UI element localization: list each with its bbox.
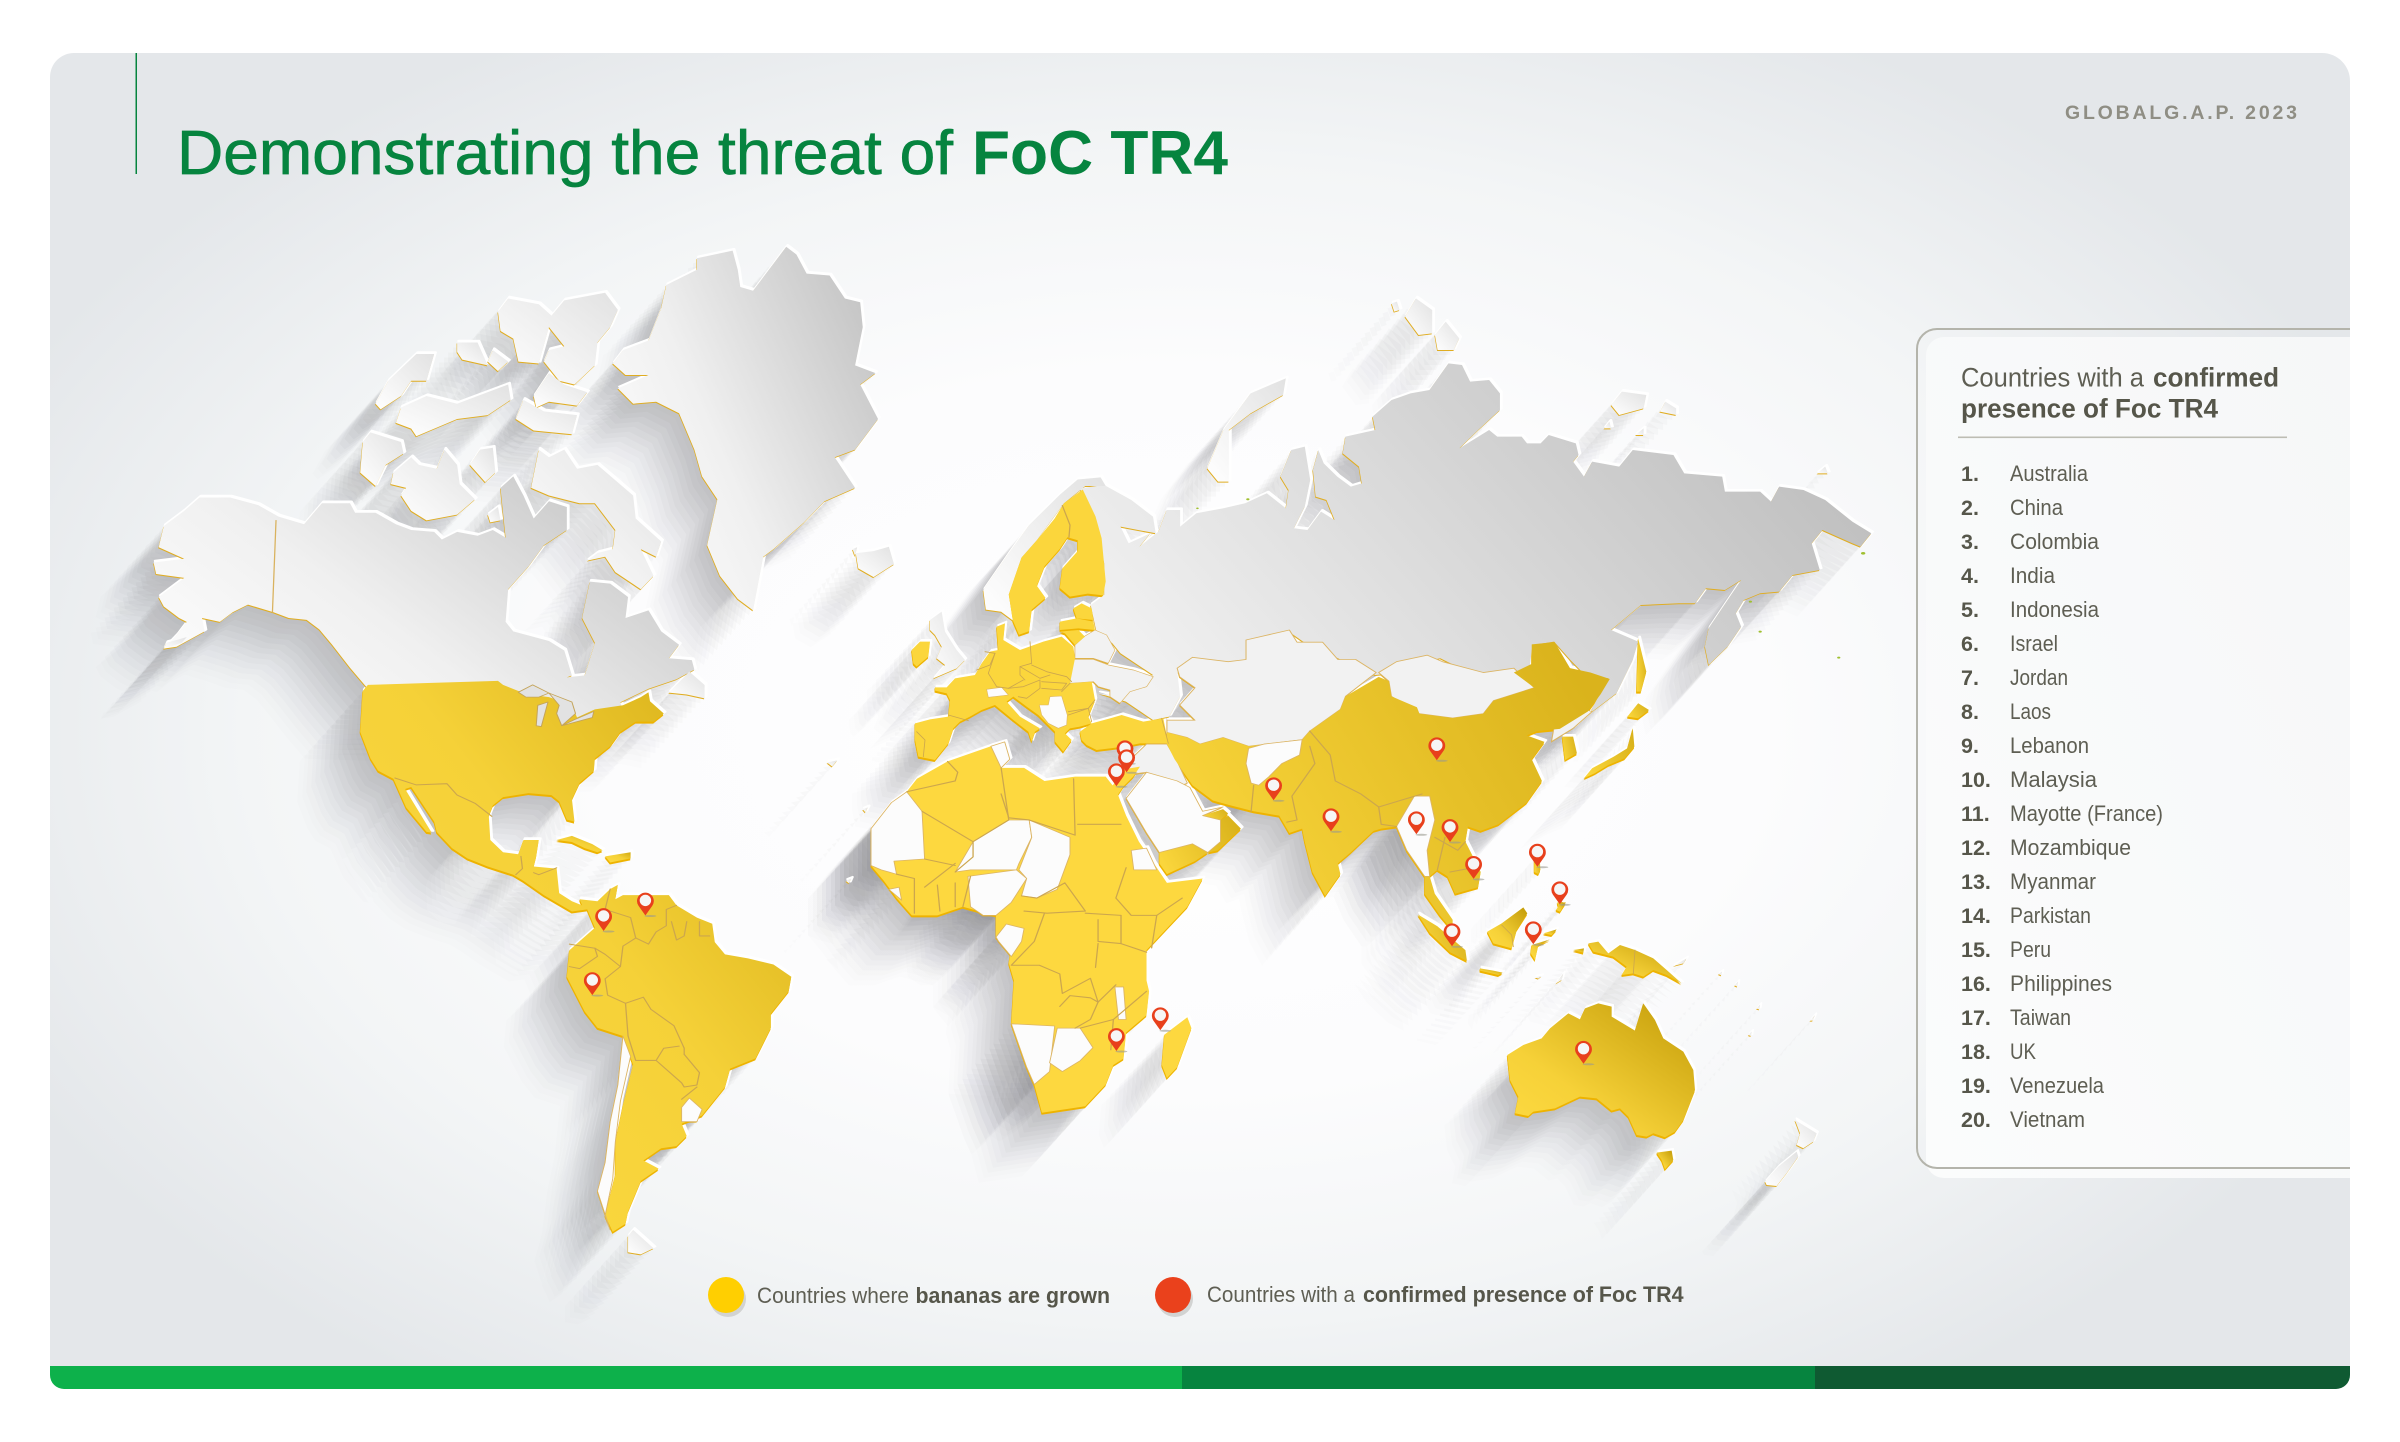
list heading xyxy=(1961,363,2279,424)
list of countries: Mozambique xyxy=(2010,835,2131,860)
list of countries: 12. xyxy=(1961,836,1991,860)
stray green islets xyxy=(1196,498,1865,659)
legend: bananas: bananas are grown xyxy=(916,1283,1110,1308)
list of countries xyxy=(1961,461,2163,1132)
gold lower edge xyxy=(153,248,1871,1255)
list of countries: Parkistan xyxy=(2010,903,2091,928)
list of countries: 7. xyxy=(1961,666,1979,690)
long cast shadows xyxy=(91,252,1867,1324)
list of countries: Myanmar xyxy=(2010,869,2096,894)
land: Eastern Europe, Central Asia, Mongolia xyxy=(1070,630,1592,787)
panel: country list xyxy=(1917,329,2350,1178)
list of countries: 5. xyxy=(1961,598,1979,622)
list of countries: 3. xyxy=(1961,530,1979,554)
list of countries: India xyxy=(2010,563,2056,588)
land: Europe, banana growing xyxy=(912,489,1168,760)
legend: Foc TR4 xyxy=(1155,1277,1684,1317)
legend xyxy=(708,1277,1684,1317)
title: FoC TR4 xyxy=(972,119,1229,188)
list of countries: 16. xyxy=(1961,972,1991,996)
legend: bananas: Countries where xyxy=(757,1283,909,1308)
list heading: Countries with a xyxy=(1961,363,2145,393)
list of countries: Vietnam xyxy=(2010,1107,2085,1132)
title: Demonstrating the threat of xyxy=(177,119,954,188)
list of countries: Peru xyxy=(2010,937,2051,962)
list of countries: 13. xyxy=(1961,870,1991,894)
land: other non-growing islands, Norway, UK, New Zealand xyxy=(628,298,1828,1254)
footer colour bar xyxy=(50,1366,2350,1389)
list of countries: 18. xyxy=(1961,1040,1991,1064)
list heading: confirmed xyxy=(2153,363,2279,393)
land: Americas, banana growing xyxy=(360,681,791,1232)
list of countries: 11. xyxy=(1961,802,1990,826)
list of countries: Colombia xyxy=(2010,529,2100,554)
land: Arctic islands xyxy=(164,293,857,698)
lakes xyxy=(518,685,594,727)
list of countries: 9. xyxy=(1961,734,1979,758)
list of countries: UK xyxy=(2010,1039,2036,1064)
world map xyxy=(91,245,1873,1324)
land: Canada and Alaska xyxy=(154,476,694,718)
list of countries: 17. xyxy=(1961,1006,1991,1030)
land: Africa, banana growing xyxy=(871,746,1203,1113)
list of countries: Indonesia xyxy=(2010,597,2100,622)
list of countries: 8. xyxy=(1961,700,1979,724)
list of countries: Lebanon xyxy=(2010,733,2089,758)
land: non-growing countries xyxy=(597,687,1435,1230)
list of countries: Philippines xyxy=(2010,971,2112,996)
land: Greenland xyxy=(613,247,878,610)
land: Russia xyxy=(1080,363,1871,720)
list of countries: 19. xyxy=(1961,1074,1991,1098)
legend: Foc TR4: Countries with a xyxy=(1207,1282,1356,1307)
list of countries: 4. xyxy=(1961,564,1979,588)
list of countries: Laos xyxy=(2010,699,2051,724)
list of countries: 20. xyxy=(1961,1108,1991,1132)
list of countries: Taiwan xyxy=(2010,1005,2071,1030)
list of countries: China xyxy=(2010,495,2064,520)
legend: Foc TR4: confirmed presence of Foc TR4 xyxy=(1363,1282,1684,1307)
list of countries: 2. xyxy=(1961,496,1979,520)
list of countries: 1. xyxy=(1961,462,1979,486)
list of countries: Mayotte (France) xyxy=(2010,801,2163,826)
land: Asia, banana growing xyxy=(1159,638,1649,961)
pins: confirmed presence of Foc TR4 xyxy=(584,737,1594,1065)
list of countries: Australia xyxy=(2010,461,2089,486)
list of countries: 15. xyxy=(1961,938,1991,962)
list of countries: Malaysia xyxy=(2010,767,2098,792)
list of countries: Venezuela xyxy=(2010,1073,2105,1098)
white paper edge xyxy=(155,245,1873,1253)
source label: GLOBALG.A.P. 2023 xyxy=(2065,102,2297,124)
list of countries: 6. xyxy=(1961,632,1979,656)
list heading: presence of Foc TR4 xyxy=(1961,394,2218,424)
list of countries: Jordan xyxy=(2010,665,2068,690)
list of countries: 14. xyxy=(1961,904,1991,928)
land: Oceania and Indonesia, banana growing xyxy=(1480,902,1695,1169)
list of countries: 10. xyxy=(1961,768,1991,792)
header rule xyxy=(136,53,137,174)
country borders xyxy=(272,506,1635,1099)
list of countries: Israel xyxy=(2010,631,2058,656)
legend: bananas xyxy=(708,1277,1110,1317)
